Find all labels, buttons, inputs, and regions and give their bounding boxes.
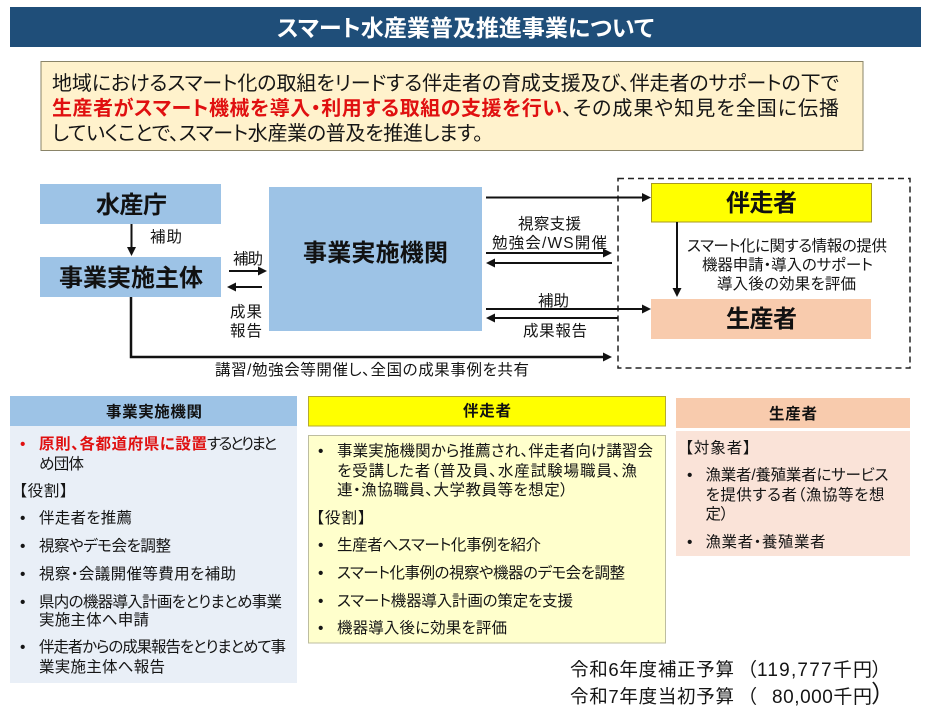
panel body: 伴走者: • bbox=[318, 565, 323, 582]
box: 事業実施主体: 事業実施主体 bbox=[59, 265, 203, 292]
panel text: 事業実施機関: 【役割】 bbox=[19, 482, 68, 500]
panel body: 生産者: 定） bbox=[706, 505, 728, 523]
box: 生産者: 生産者 bbox=[726, 306, 797, 333]
label: 成果報告: 報告 bbox=[230, 322, 262, 340]
text: 伴走者 support description: 機器申請・導入のサポート bbox=[702, 256, 873, 274]
label: 成果報告: 成果 bbox=[230, 303, 262, 321]
panel header: 事業実施機関: 事業実施機関 bbox=[106, 402, 202, 421]
arrow: support right bbox=[486, 248, 612, 258]
label: 講習 sharing: 講習/勉強会等開催し、全国の成果事例を共有 bbox=[215, 361, 529, 379]
box: 伴走者 bbox=[652, 184, 872, 222]
arrow: 伴走者 to 生産者 bbox=[672, 222, 682, 297]
panel text: 事業実施機関: 視察・会議開催等費用を補助 bbox=[39, 565, 236, 583]
panel text: 事業実施機関: め団体 bbox=[39, 455, 84, 473]
panel text: 事業実施機関: 業実施主体へ報告 bbox=[39, 658, 165, 676]
box: 生産者 bbox=[651, 299, 871, 339]
panel header: 生産者: 生産者 bbox=[769, 405, 817, 423]
panel text: 事業実施機関: 伴走者を推薦 bbox=[39, 509, 132, 527]
panel body: 生産者: 漁業者・養殖業者 bbox=[706, 533, 826, 551]
label: 成果報告 bbox=[230, 303, 262, 340]
panel body: 生産者: 【対象者】 bbox=[685, 439, 751, 457]
box: 水産庁: 水産庁 bbox=[96, 192, 167, 219]
intro text box: していくことで、スマート水産業の普及を推進します。 bbox=[52, 122, 483, 145]
panel text: 事業実施機関: するとりまと bbox=[207, 435, 277, 453]
arrow: 生産者 report to 機関 bbox=[486, 314, 618, 322]
arrow: 機関 to 生産者 bbox=[486, 304, 651, 314]
panel text: 事業実施機関: • bbox=[20, 639, 25, 656]
label: 成果報告 horizontal: 成果報告 bbox=[523, 322, 587, 340]
label: 視察支援: 勉強会/WS開催 bbox=[492, 234, 607, 252]
budget text: 令和6年度補正予算 bbox=[570, 659, 734, 680]
budget text: （ bbox=[747, 686, 757, 708]
panel header: 伴走者 bbox=[308, 396, 666, 426]
box: 事業実施機関: 事業実施機関 bbox=[303, 240, 448, 267]
box: 伴走者: 伴走者 bbox=[726, 190, 797, 217]
panel body: 伴走者: を受講した者（普及員、水産試験場職員、漁 bbox=[337, 462, 637, 480]
panel body: 伴走者: 機器導入後に効果を評価 bbox=[337, 619, 507, 637]
text: 伴走者 support description: 導入後の効果を評価 bbox=[717, 275, 856, 293]
panel body: 生産者: • bbox=[687, 467, 692, 484]
box: 事業実施主体 bbox=[40, 257, 221, 297]
panel body: 生産者 bbox=[676, 431, 910, 556]
label: 補助: 補助 bbox=[150, 228, 182, 246]
intro text box: 、その成果や知見を全国に伝播 bbox=[562, 97, 839, 120]
arrow: 機関 to 伴走者 bbox=[486, 193, 651, 202]
panel body: 伴走者: • bbox=[318, 537, 323, 554]
panel body: 伴走者: • bbox=[318, 620, 323, 637]
label: 補助 to 機関: 補助 bbox=[233, 250, 263, 268]
panel text: 事業実施機関: 視察やデモ会を調整 bbox=[39, 536, 171, 555]
title banner bbox=[10, 7, 921, 47]
panel text: 事業実施機関: 原則、各都道府県に設置 bbox=[39, 434, 207, 453]
arrow: support left bbox=[486, 258, 612, 268]
panel text: 事業実施機関: 県内の機器導入計画をとりまとめ事業 bbox=[39, 593, 282, 611]
panel text: 事業実施機関: • bbox=[20, 538, 25, 555]
panel: 事業実施機関 bbox=[10, 396, 297, 683]
arrow: 主体 to 機関 bbox=[229, 266, 267, 276]
label: 補助 to 生産者: 補助 bbox=[538, 292, 569, 310]
title banner: スマート水産業普及推進事業について bbox=[277, 15, 654, 41]
arrow: 水産庁 to 事業実施主体 bbox=[127, 224, 136, 256]
label: 視察支援 bbox=[492, 215, 607, 252]
intro text box: 生産者がスマート機械を導入・利用する取組の支援を行い bbox=[52, 96, 562, 120]
label: 視察支援: 視察支援 bbox=[518, 215, 581, 233]
panel body: 生産者: • bbox=[687, 534, 692, 551]
panel: 生産者 bbox=[676, 398, 910, 556]
dashed group frame bbox=[618, 178, 910, 368]
panel text: 事業実施機関: 実施主体へ申請 bbox=[39, 611, 149, 629]
panel header: 事業実施機関 bbox=[10, 396, 297, 426]
panel body: 伴走者: 事業実施機関から推薦され、伴走者向け講習会 bbox=[337, 442, 653, 460]
budget text: 令和7年度当初予算 bbox=[570, 686, 734, 707]
budget text: 119,777千円 bbox=[757, 659, 872, 681]
box: 事業実施機関 bbox=[269, 187, 482, 331]
panel body: 生産者: を提供する者（漁協等を想 bbox=[706, 486, 884, 504]
panel body: 伴走者: 生産者へスマート化事例を紹介 bbox=[337, 536, 541, 554]
text: 伴走者 support description: スマート化に関する情報の提供 bbox=[687, 237, 887, 255]
panel text: 事業実施機関 bbox=[19, 434, 286, 676]
intro text box: 地域におけるスマート化の取組をリードする伴走者の育成支援及び、伴走者のサポートの下で bbox=[52, 72, 839, 95]
budget text: ） bbox=[872, 681, 884, 708]
budget text: ） bbox=[871, 659, 882, 681]
budget text: （ bbox=[747, 659, 757, 681]
panel body: 伴走者: • bbox=[318, 593, 323, 610]
panel body: 伴走者: 連・漁協職員、大学教員等を想定） bbox=[337, 481, 568, 499]
panel text: 事業実施機関: 伴走者からの成果報告をとりまとめて事 bbox=[39, 638, 286, 656]
panel body: 伴走者: 【役割】 bbox=[316, 509, 366, 527]
panel text: 事業実施機関: • bbox=[20, 566, 25, 583]
arrow: 機関 to 主体 bbox=[227, 282, 262, 292]
budget text bbox=[570, 659, 884, 708]
box: 水産庁 bbox=[40, 184, 221, 224]
panel text: 事業実施機関: • bbox=[20, 594, 25, 611]
panel text: 事業実施機関: • bbox=[20, 510, 25, 527]
panel: 伴走者 bbox=[308, 396, 666, 643]
panel text: 事業実施機関: • bbox=[20, 436, 25, 453]
panel header: 生産者 bbox=[676, 398, 910, 428]
budget text: 80,000千円 bbox=[772, 686, 872, 708]
panel body: 伴走者: • bbox=[318, 443, 323, 460]
intro text box bbox=[41, 62, 863, 150]
panel header: 伴走者: 伴走者 bbox=[463, 402, 511, 420]
panel body: 伴走者: スマート機器導入計画の策定を支援 bbox=[337, 592, 573, 610]
arrow: 主体 to nationwide sharing bbox=[131, 297, 612, 362]
panel body: 生産者: 漁業者/養殖業者にサービス bbox=[706, 466, 888, 484]
panel body: 伴走者 bbox=[308, 436, 666, 643]
text: 伴走者 support description bbox=[687, 237, 887, 293]
panel body: 伴走者: スマート化事例の視察や機器のデモ会を調整 bbox=[337, 563, 625, 582]
